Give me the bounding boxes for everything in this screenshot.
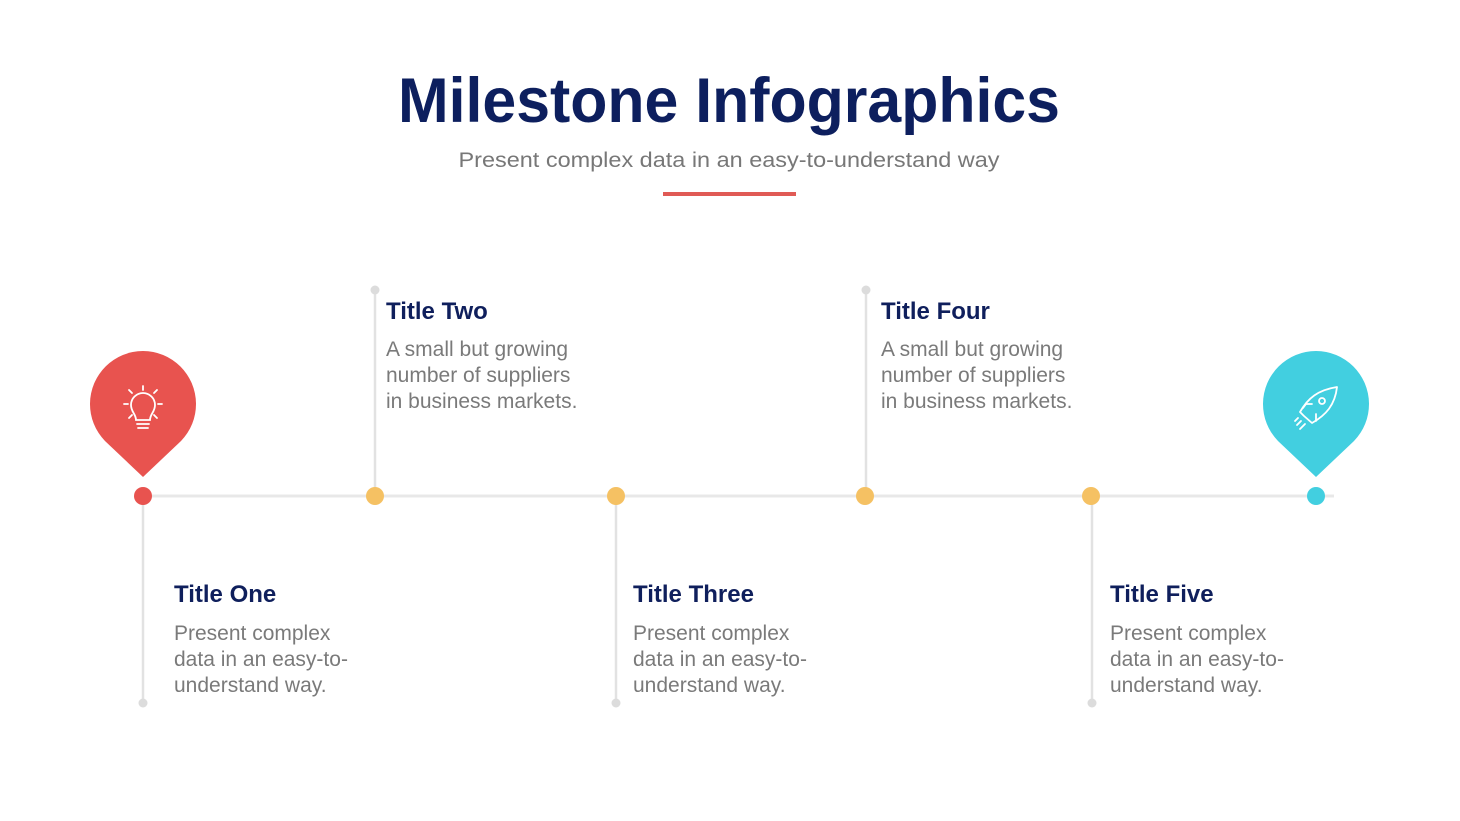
milestone 2 text: Title Two bbox=[386, 298, 488, 325]
milestone 2 text: A small but growing bbox=[386, 338, 568, 361]
milestone 4 text bbox=[881, 298, 1072, 413]
milestone 5 text: data in an easy-to- bbox=[1110, 648, 1284, 671]
milestone 4 text: A small but growing bbox=[881, 338, 1063, 361]
milestone 3 text: understand way. bbox=[633, 674, 786, 697]
milestone 1 text: Present complex bbox=[174, 622, 331, 645]
milestone 5 text bbox=[1110, 581, 1284, 697]
accent bar bbox=[663, 192, 796, 196]
milestone 2 text: number of suppliers bbox=[386, 364, 570, 387]
milestone 1 text: Title One bbox=[174, 581, 276, 608]
milestone 4 text: Title Four bbox=[881, 298, 990, 325]
milestone 5 text: understand way. bbox=[1110, 674, 1263, 697]
milestone 3 text: Present complex bbox=[633, 622, 790, 645]
milestone 5 text: Title Five bbox=[1110, 581, 1214, 608]
milestone 4 text: in business markets. bbox=[881, 390, 1072, 413]
timeline bbox=[134, 286, 1334, 708]
milestone 3 text: data in an easy-to- bbox=[633, 648, 807, 671]
milestone 1 text: data in an easy-to- bbox=[174, 648, 348, 671]
milestone 2 text bbox=[386, 298, 577, 413]
milestone 4 text: number of suppliers bbox=[881, 364, 1065, 387]
milestone 1 text: understand way. bbox=[174, 674, 327, 697]
milestone 3 text: Title Three bbox=[633, 581, 754, 608]
subtitle: Present complex data in an easy-to-understand way bbox=[458, 149, 1000, 172]
title: Milestone Infographics bbox=[398, 66, 1060, 136]
milestone 2 text: in business markets. bbox=[386, 390, 577, 413]
milestone 5 text: Present complex bbox=[1110, 622, 1267, 645]
icon: red pin with lightbulb bbox=[90, 351, 196, 477]
milestone 1 text bbox=[174, 581, 348, 697]
milestone 3 text bbox=[633, 581, 807, 697]
icon: cyan pin with rocket bbox=[1263, 351, 1369, 477]
